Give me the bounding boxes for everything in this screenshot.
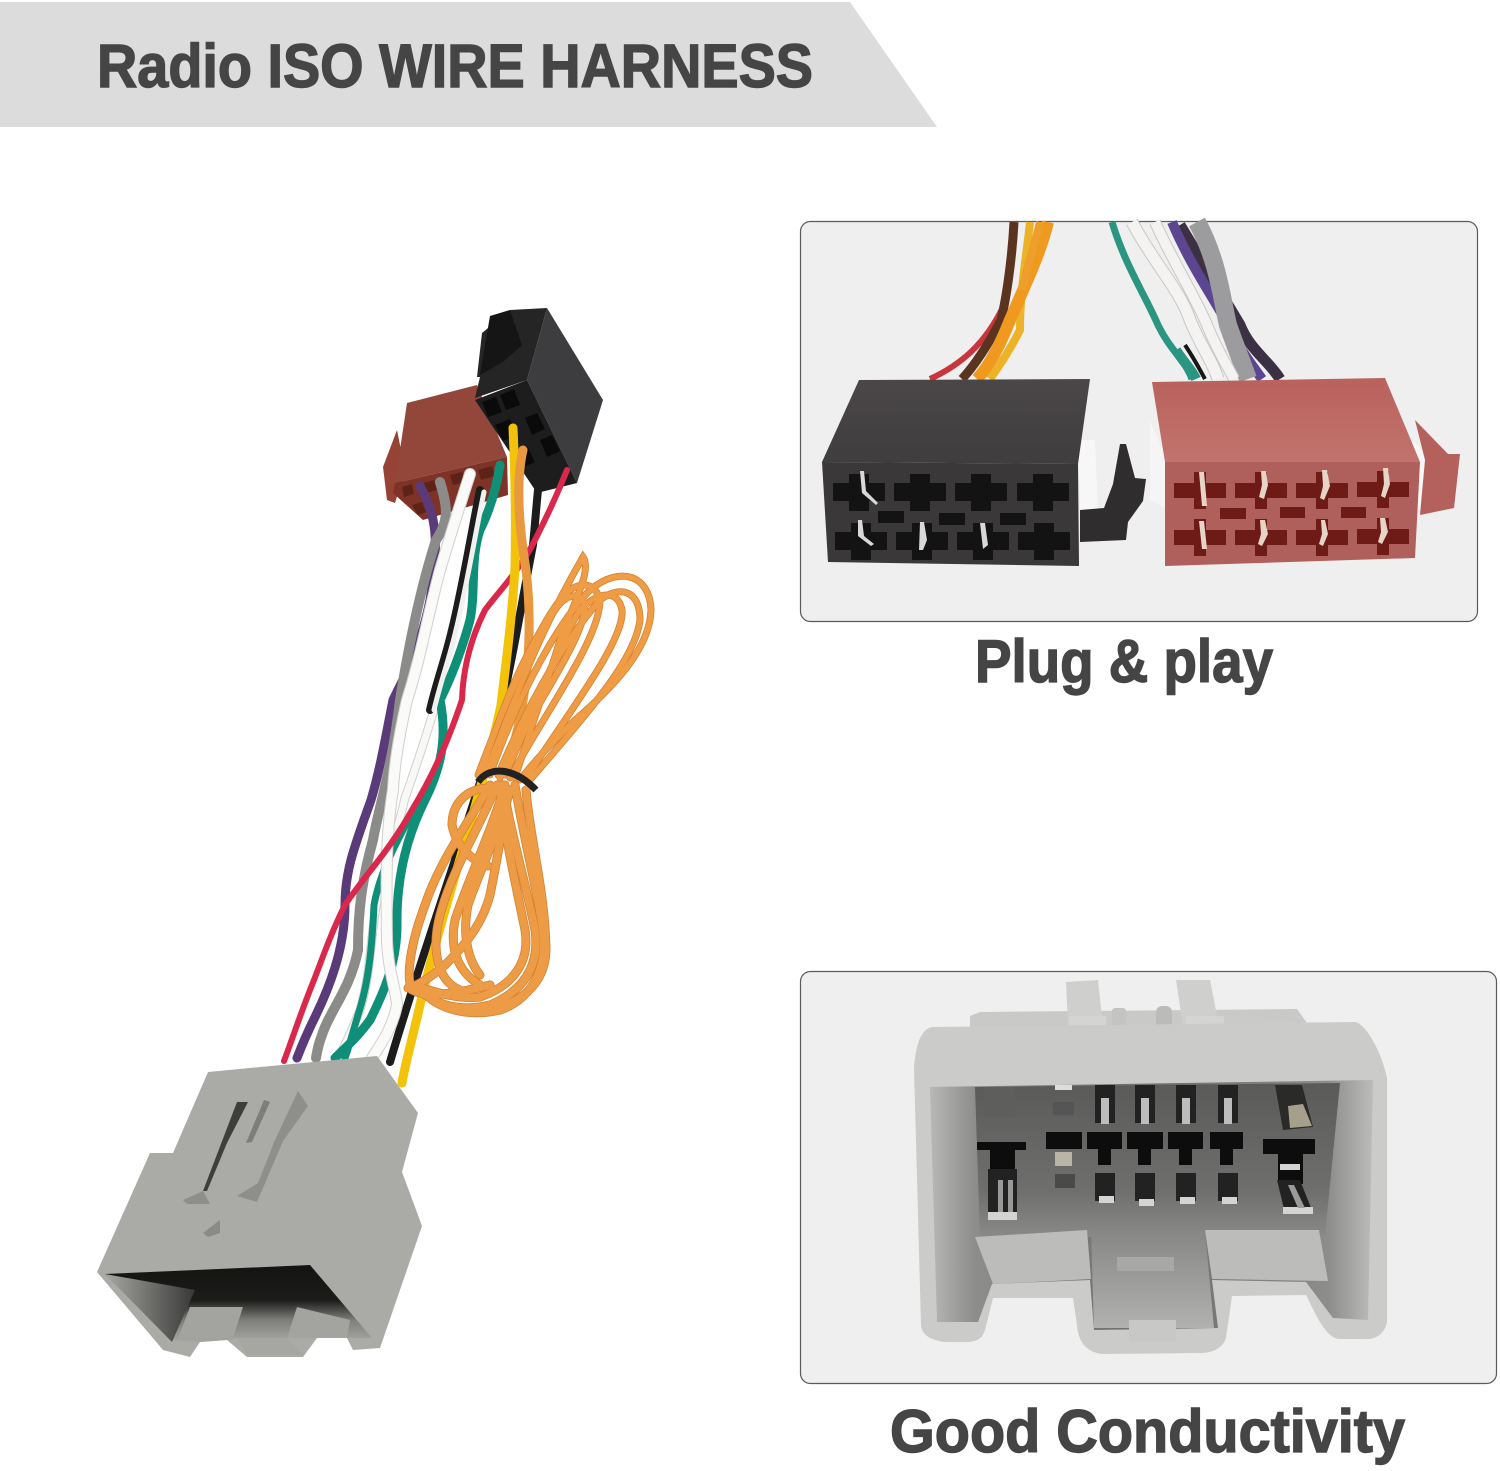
panel: plug and play photo xyxy=(800,222,1478,622)
heading: plug and play: Plug & play xyxy=(975,628,1274,695)
left wire bundle xyxy=(930,222,1048,379)
product photo: full wire harness xyxy=(97,308,651,1357)
icon: black ISO connector xyxy=(475,308,603,493)
black connector xyxy=(822,379,1146,566)
heading: good conductivity: Good Conductivity xyxy=(890,1398,1406,1465)
icon: grey ISO plug connector xyxy=(97,1056,422,1357)
connector latch tabs xyxy=(970,980,1312,1046)
right wire bundle xyxy=(1112,222,1280,379)
metal pins: upper row xyxy=(984,1085,1313,1130)
grey connector housing xyxy=(914,1022,1387,1354)
panel: good conductivity photo xyxy=(800,972,1496,1384)
black cable tie xyxy=(478,771,536,790)
metal pins: lower row xyxy=(977,1132,1315,1220)
white latch strips behind connectors xyxy=(1078,440,1098,515)
icon: red ISO connector xyxy=(383,385,508,520)
orange wire coil xyxy=(408,557,651,1013)
red connector xyxy=(1152,378,1460,566)
title banner: Radio ISO WIRE HARNESS xyxy=(97,32,813,100)
harness wires xyxy=(284,428,567,1083)
title banner xyxy=(0,2,937,127)
connector interior xyxy=(930,1080,1373,1342)
